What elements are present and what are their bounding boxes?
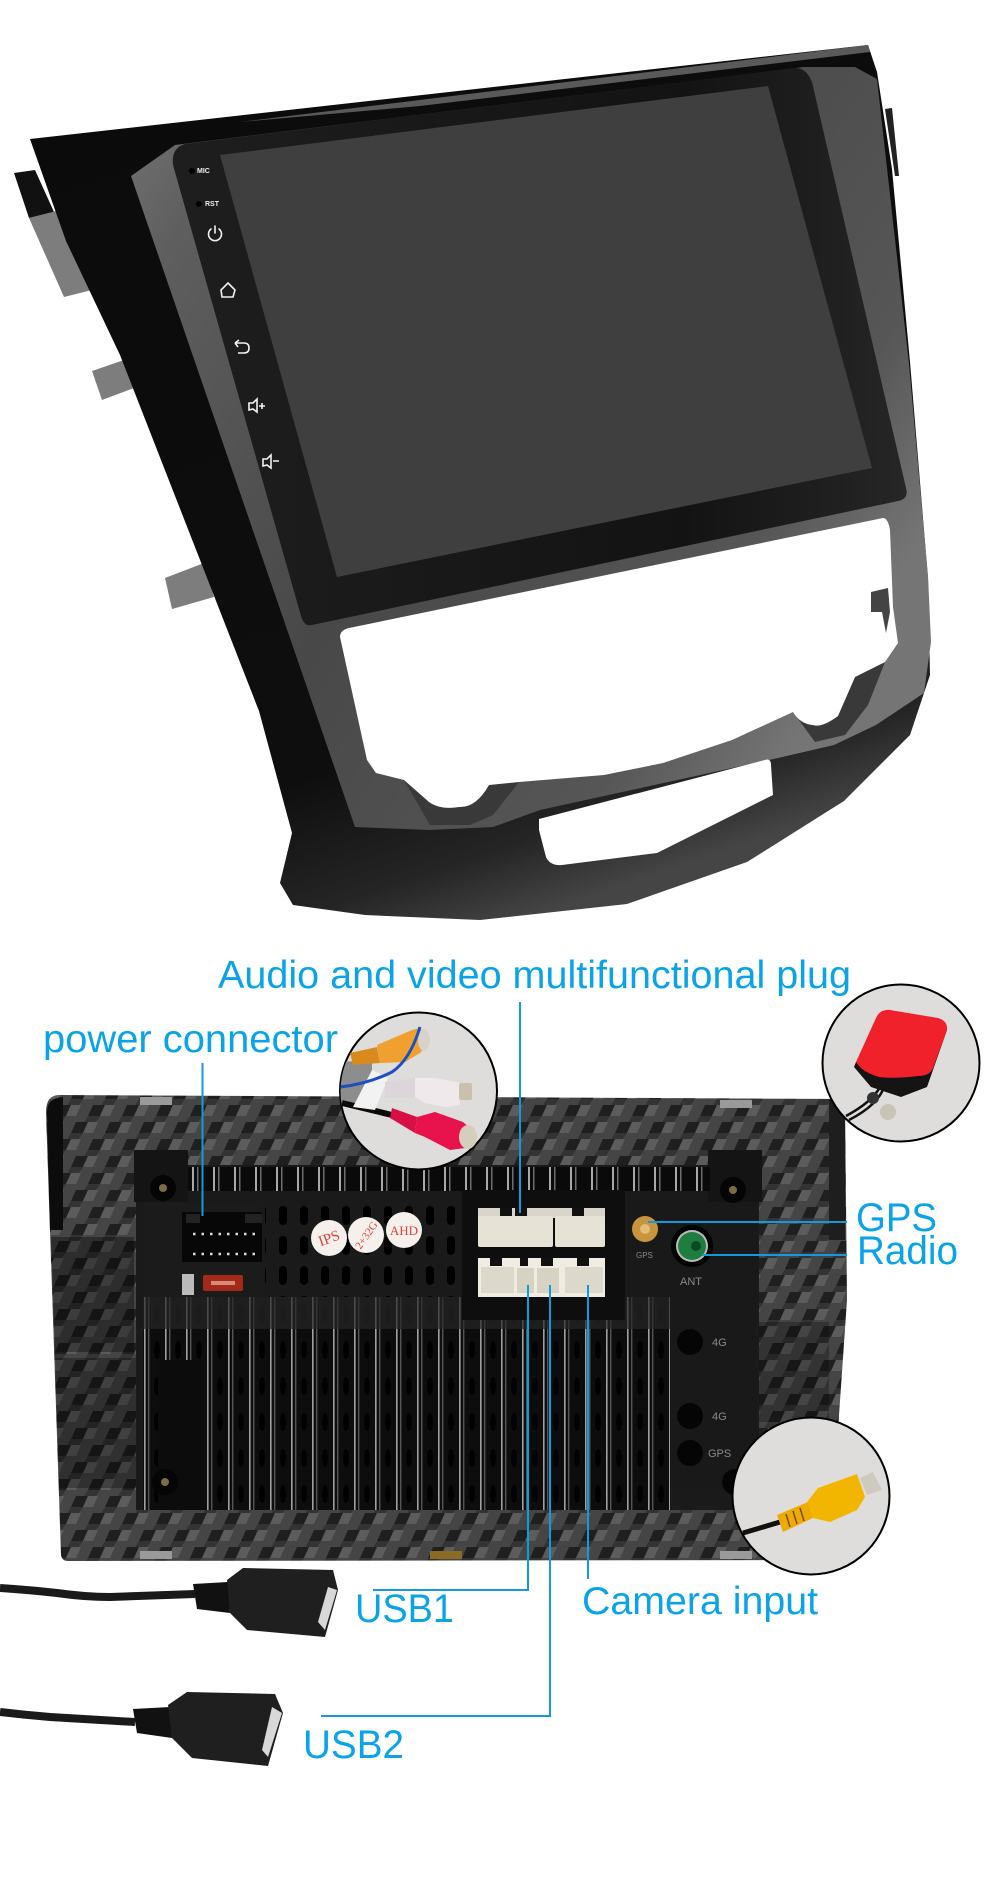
GPS gold connector	[632, 1216, 658, 1260]
GPS port	[677, 1440, 731, 1466]
GPS gold connector: GPS	[636, 1251, 653, 1260]
icon: back	[235, 340, 249, 353]
glossy gray frame	[131, 67, 931, 830]
antenna section	[625, 1202, 757, 1487]
front unit: head unit with frame	[14, 45, 931, 920]
rear unit: back panel	[46, 1095, 847, 1561]
4G port two: 4G	[712, 1411, 727, 1423]
lower cooling fins	[143, 1297, 670, 1510]
icon: volume down	[263, 455, 279, 468]
USB cable two	[0, 1692, 283, 1766]
label: USB2: USB2	[303, 1723, 404, 1767]
reset hole and label: RST	[205, 201, 220, 208]
inset: camera RCA plug	[732, 1418, 890, 1574]
touch keys	[189, 168, 279, 468]
black power connector	[182, 1212, 262, 1262]
sticker: AHD	[386, 1212, 422, 1248]
climate panel cut-out	[340, 518, 898, 808]
4G port one	[677, 1329, 727, 1355]
mic hole and label	[189, 168, 210, 175]
connector section	[462, 1190, 625, 1320]
lower vent cut-out	[539, 760, 773, 865]
outer frame silhouette	[30, 45, 930, 920]
radio antenna socket	[671, 1225, 713, 1288]
mounting tab right	[885, 108, 899, 176]
lower left mount hole	[158, 1360, 204, 1510]
GPS port: GPS	[708, 1448, 731, 1460]
label section with vents	[265, 1202, 460, 1297]
sticker: IPS	[311, 1220, 347, 1256]
4G port one: 4G	[712, 1337, 727, 1349]
sticker: IPS: IPS	[316, 1228, 342, 1250]
label: Radio: Radio	[857, 1229, 958, 1273]
sticker: AHD: AHD	[390, 1223, 418, 1238]
label: USB1: USB1	[355, 1587, 454, 1631]
icon: power	[209, 226, 222, 241]
darker plate sides	[47, 1097, 845, 1488]
radio antenna socket: ANT	[680, 1276, 702, 1288]
display	[220, 86, 872, 577]
4G port two	[677, 1403, 727, 1429]
icon: home	[221, 283, 235, 297]
callout lines	[202, 1002, 847, 1716]
power connector section	[145, 1203, 263, 1297]
top edge highlight	[240, 45, 870, 122]
fuse	[182, 1274, 243, 1295]
lower connector block	[478, 1258, 605, 1297]
carbon back plate	[46, 1095, 847, 1561]
inset: RCA audio video plugs	[338, 1012, 497, 1170]
right clip in cut-out	[871, 588, 890, 633]
mic hole and label: MIC	[197, 168, 210, 175]
reset hole and label	[196, 201, 220, 208]
USB cable one	[0, 1568, 338, 1637]
sticker: 2+32G: 2+32G	[353, 1220, 381, 1252]
audio video connector block	[478, 1208, 605, 1247]
chassis corner blocks	[134, 1150, 762, 1202]
mounting tabs left	[14, 170, 214, 609]
bezel	[173, 68, 907, 625]
knob recess right	[793, 662, 885, 742]
label: GPS: GPS	[856, 1196, 937, 1240]
inset: GPS antenna	[822, 984, 980, 1142]
icon: volume up	[249, 399, 265, 412]
metal chassis	[136, 1165, 759, 1510]
label: audio and video plug: Audio and video multifunctional plug	[218, 954, 851, 997]
label: power connector: power connector	[43, 1018, 338, 1061]
knob recess left	[404, 780, 519, 825]
top cooling fins	[188, 1167, 710, 1191]
corner screws	[150, 1175, 748, 1495]
plate clips	[140, 1097, 752, 1559]
sticker: 2+32G	[348, 1217, 384, 1253]
label: camera input: Camera input	[582, 1580, 818, 1623]
upper fin band	[143, 1297, 670, 1329]
